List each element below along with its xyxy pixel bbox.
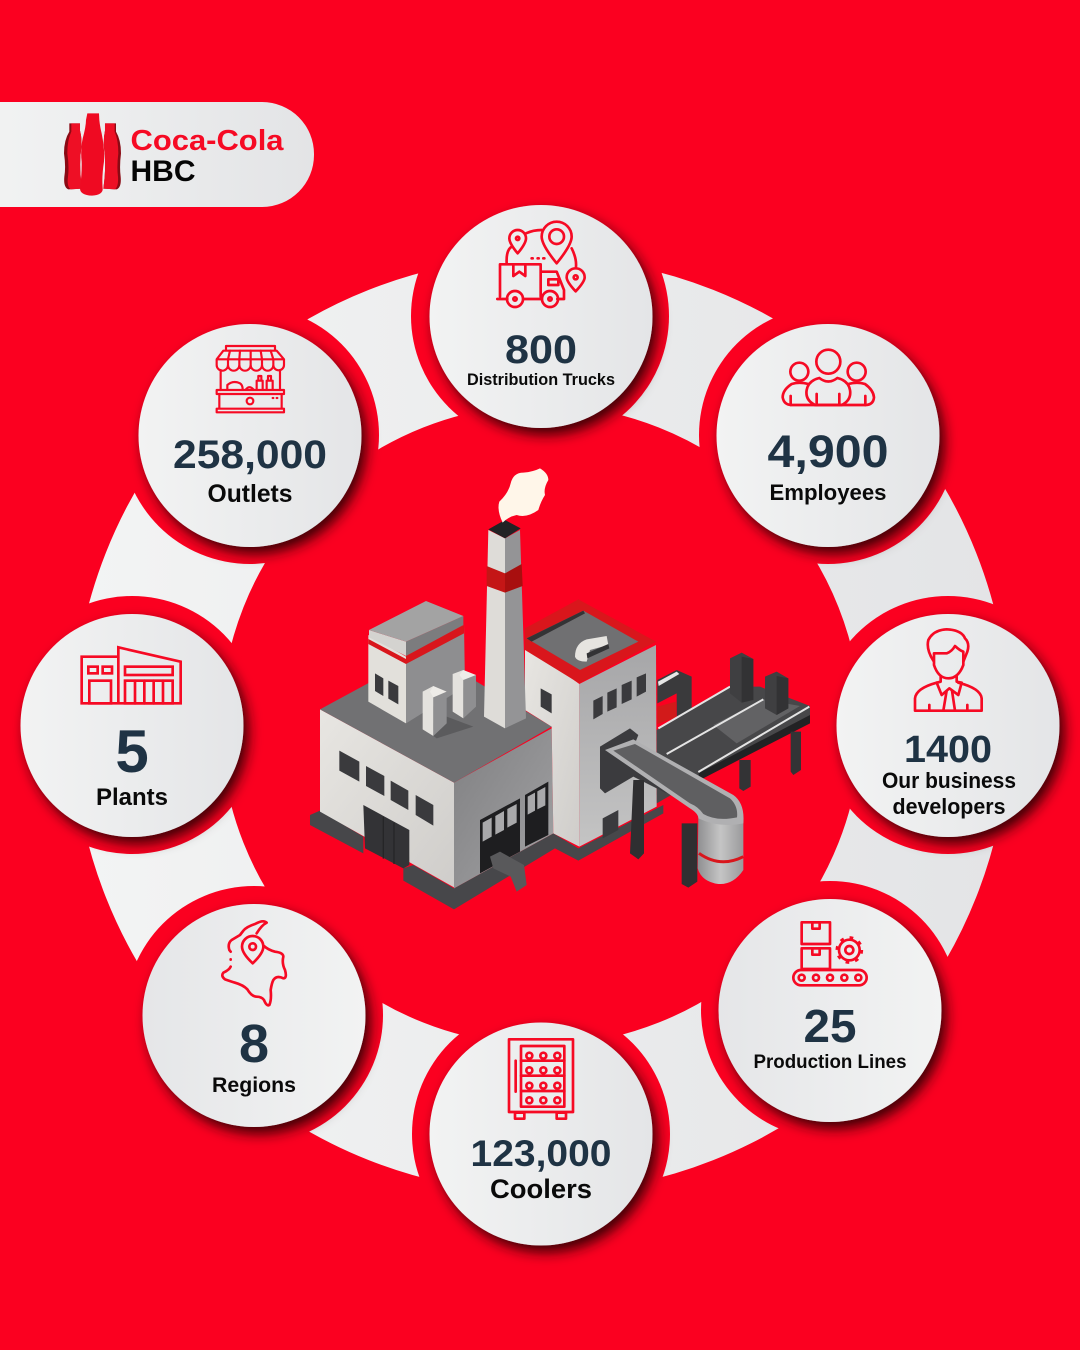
smoke xyxy=(499,468,548,523)
icon: people xyxy=(783,350,874,405)
circle: business developers xyxy=(836,614,1060,837)
label: regions: Regions xyxy=(212,1073,296,1097)
ring of light segments xyxy=(147,331,935,1119)
circle: distribution trucks xyxy=(430,205,652,428)
red halos behind the stat circles xyxy=(3,187,1077,1263)
stat: 258,000: 258,000 xyxy=(173,433,327,477)
chimney xyxy=(484,520,526,728)
back conveyor xyxy=(657,653,810,803)
label: outlets: Outlets xyxy=(208,480,292,508)
icon: map with pin xyxy=(222,921,286,1005)
logo pill xyxy=(0,102,314,207)
stat: 25: 25 xyxy=(804,1000,856,1052)
label: our business developers xyxy=(882,768,1016,819)
stat: 800: 800 xyxy=(505,328,577,372)
circle: production lines xyxy=(718,899,942,1122)
circle: employees xyxy=(716,324,940,547)
icon: conveyor with boxes and gear xyxy=(793,922,867,985)
small tower xyxy=(368,601,476,738)
plinth xyxy=(310,805,663,909)
main block xyxy=(320,652,553,892)
stat: 4,900: 4,900 xyxy=(768,426,888,477)
logo wordmark: Coca-Cola xyxy=(130,125,284,157)
label: coolers: Coolers xyxy=(490,1174,592,1204)
right tower xyxy=(525,599,657,847)
label: employees: Employees xyxy=(770,480,886,505)
icon: three bottles xyxy=(64,113,121,196)
icon: person with tie xyxy=(915,629,982,711)
icon: market stall xyxy=(217,346,284,412)
circle: coolers xyxy=(430,1022,652,1246)
stat: 5: 5 xyxy=(115,718,149,785)
circle: plants xyxy=(20,614,244,837)
stat: 123,000: 123,000 xyxy=(470,1133,612,1174)
icon: truck with location pins xyxy=(497,222,585,307)
label: our business developers: developers xyxy=(892,794,1006,819)
stat: 1400: 1400 xyxy=(904,729,992,771)
central factory illustration xyxy=(310,468,810,909)
label: distribution trucks: Distribution Trucks xyxy=(467,371,615,389)
label: our business developers: Our business xyxy=(882,768,1016,793)
label: production lines: Production Lines xyxy=(754,1052,906,1073)
logo wordmark xyxy=(130,125,284,188)
icon: plant building xyxy=(82,647,181,703)
logo wordmark: HBC xyxy=(130,155,196,188)
circle: regions xyxy=(142,904,366,1127)
stat: 8: 8 xyxy=(239,1014,269,1074)
label: plants: Plants xyxy=(96,784,168,811)
icon: cooler xyxy=(509,1039,573,1119)
front conveyor xyxy=(600,728,744,888)
circle: outlets xyxy=(138,324,362,547)
